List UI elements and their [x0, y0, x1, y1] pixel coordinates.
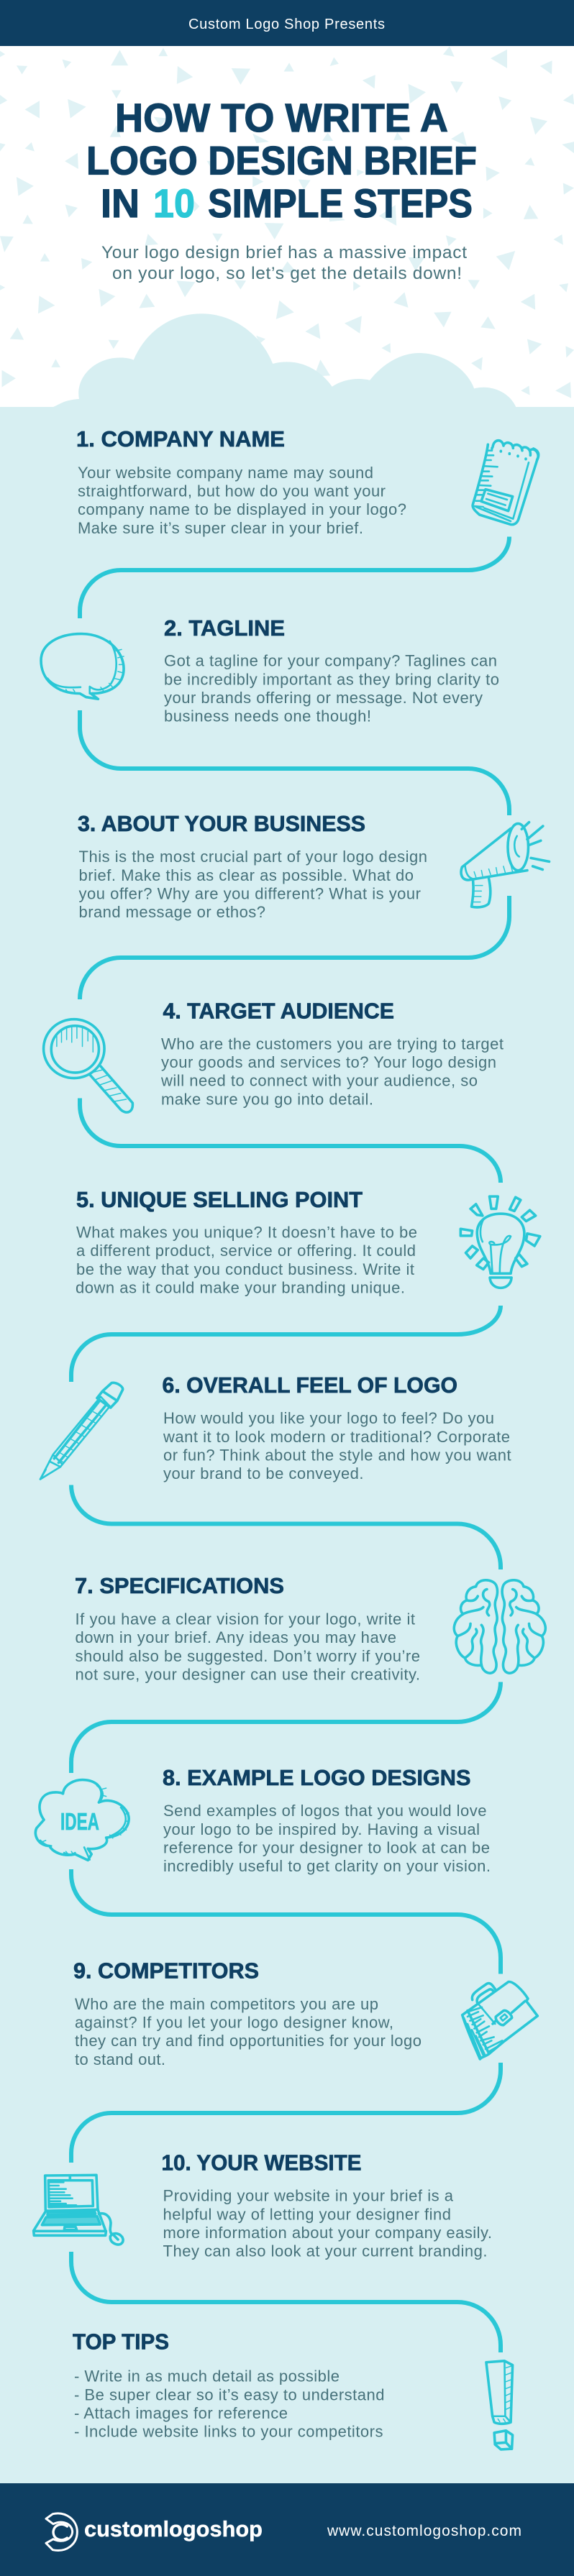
top tips: [73, 2329, 384, 2441]
icon: idea cloud: [35, 1780, 129, 1860]
footer bar: customlogoshop: [84, 2516, 263, 2541]
background triangle pattern: [0, 46, 574, 398]
step 2 text: Got a tagline for your company? Taglines can: [164, 652, 497, 670]
icon: light bulb: [460, 1196, 540, 1288]
step 2 text: your brands offering or message. Not every: [164, 689, 483, 707]
step 3 text: you offer? Why are you different? What is your: [79, 884, 421, 902]
step 8 text: reference for your designer to look at can be: [163, 1839, 490, 1856]
subtitle: on your logo, so let’s get the details down!: [112, 264, 462, 283]
title: HOW TO WRITE A: [115, 95, 448, 140]
top tips: - Attach images for reference: [74, 2404, 288, 2422]
icon: brain: [454, 1580, 545, 1673]
step 7 text: down in your brief. Any ideas you may have: [75, 1628, 396, 1646]
icon: exclamation mark: [486, 2361, 513, 2449]
subtitle: Your logo design brief has a massive impact: [101, 243, 467, 262]
footer bar: www.customlogoshop.com: [327, 2523, 521, 2539]
top tips: - Write in as much detail as possible: [74, 2368, 340, 2385]
step 6 text: 6. OVERALL FEEL OF LOGO: [163, 1372, 457, 1398]
step 8 text: [163, 1765, 491, 1875]
step 5 text: What makes you unique? It doesn’t have to be: [76, 1224, 417, 1241]
step 10 text: [161, 2150, 492, 2260]
step 2 text: business needs one though!: [164, 707, 371, 725]
icon: pencil: [40, 1383, 123, 1479]
step 1 text: [76, 426, 406, 537]
step 6 text: [163, 1372, 511, 1482]
step 3 text: [78, 811, 427, 921]
step 9 text: [73, 1958, 422, 2068]
top tips: - Include website links to your competitors: [74, 2423, 383, 2441]
step 1 text: straightforward, but how do you want your: [78, 482, 386, 500]
step 5 text: a different product, service or offering. It could: [76, 1242, 416, 1260]
step 4 text: 4. TARGET AUDIENCE: [163, 998, 394, 1024]
step 9 text: they can try and find opportunities for your logo: [75, 2032, 422, 2050]
title: [86, 95, 477, 226]
icon: speech bubble: [41, 634, 124, 699]
footer bar: [0, 2483, 574, 2576]
step 7 text: If you have a clear vision for your logo, write it: [75, 1610, 415, 1628]
step 7 text: 7. SPECIFICATIONS: [75, 1573, 284, 1598]
step 4 text: your goods and services to? Your logo design: [161, 1053, 496, 1071]
icon: notebook: [473, 441, 539, 525]
step 2 text: 2. TAGLINE: [164, 615, 285, 641]
step 7 text: should also be suggested. Don’t worry if you’re: [75, 1647, 420, 1665]
step 8 text: Send examples of logos that you would love: [163, 1802, 486, 1820]
icon: laptop: [34, 2175, 123, 2245]
step 5 text: [76, 1187, 417, 1296]
connecting path: [71, 536, 509, 2352]
icon: briefcase: [463, 1982, 537, 2059]
step 8 text: 8. EXAMPLE LOGO DESIGNS: [163, 1765, 470, 1790]
step 10 text: more information about your company easily.: [163, 2224, 492, 2242]
step 1 text: 1. COMPANY NAME: [76, 426, 285, 452]
step 9 text: to stand out.: [75, 2050, 165, 2068]
step 4 text: Who are the customers you are trying to target: [161, 1035, 504, 1053]
top tips: - Be super clear so it’s easy to understand: [74, 2385, 384, 2404]
step 1 text: company name to be displayed in your logo?: [78, 500, 406, 518]
step 8 text: your logo to be inspired by. Having a visual: [163, 1820, 480, 1838]
step 5 text: down as it could make your branding unique.: [76, 1278, 405, 1296]
icon: idea cloud: IDEA: [60, 1808, 99, 1835]
step 10 text: 10. YOUR WEBSITE: [161, 2150, 361, 2176]
step 3 text: brief. Make this as clear as possible. What do: [79, 866, 414, 884]
step 4 text: [160, 998, 504, 1108]
step 9 text: against? If you let your logo designer know,: [75, 2013, 393, 2032]
title: LOGO DESIGN BRIEF: [86, 138, 477, 183]
title: IN: [101, 180, 140, 226]
step 6 text: How would you like your logo to feel? Do you: [163, 1409, 494, 1427]
step 7 text: [75, 1573, 420, 1683]
step 3 text: brand message or ethos?: [79, 903, 265, 921]
step 10 text: Providing your website in your brief is a: [163, 2187, 454, 2204]
step 3 text: This is the most crucial part of your logo design: [79, 848, 427, 866]
step 5 text: be the way that you conduct business. Write it: [76, 1260, 414, 1278]
step 9 text: Who are the main competitors you are up: [75, 1995, 378, 2013]
step 4 text: make sure you go into detail.: [161, 1090, 373, 1108]
step 4 text: will need to connect with your audience, so: [160, 1072, 478, 1090]
title: 10: [153, 180, 195, 226]
title: SIMPLE STEPS: [208, 180, 473, 226]
step 6 text: want it to look modern or traditional? Corporate: [163, 1428, 510, 1446]
step 2 text: be incredibly important as they bring clarity to: [164, 670, 499, 688]
step 8 text: incredibly useful to get clarity on your vision.: [163, 1857, 491, 1875]
step 3 text: 3. ABOUT YOUR BUSINESS: [78, 811, 365, 836]
step 9 text: 9. COMPETITORS: [73, 1958, 259, 1984]
step 1 text: Make sure it’s super clear in your brief.: [78, 519, 363, 537]
step 10 text: helpful way of letting your designer find: [163, 2205, 451, 2223]
footer logo mark: [46, 2513, 77, 2550]
step 6 text: or fun? Think about the style and how you want: [163, 1446, 511, 1464]
step 6 text: your brand to be conveyed.: [163, 1465, 364, 1482]
top header bar: [0, 0, 574, 46]
step 7 text: not sure, your designer can use their creativity.: [75, 1665, 420, 1683]
subtitle: [101, 243, 467, 283]
top tips: TOP TIPS: [73, 2329, 169, 2355]
step 10 text: They can also look at your current branding.: [163, 2242, 488, 2260]
step 2 text: [164, 615, 499, 725]
step 1 text: Your website company name may sound: [78, 464, 373, 482]
step 5 text: 5. UNIQUE SELLING POINT: [76, 1187, 363, 1212]
top header bar: Custom Logo Shop Presents: [188, 17, 385, 32]
icon: magnifying glass: [44, 1019, 132, 1112]
icon: megaphone: [461, 822, 550, 907]
